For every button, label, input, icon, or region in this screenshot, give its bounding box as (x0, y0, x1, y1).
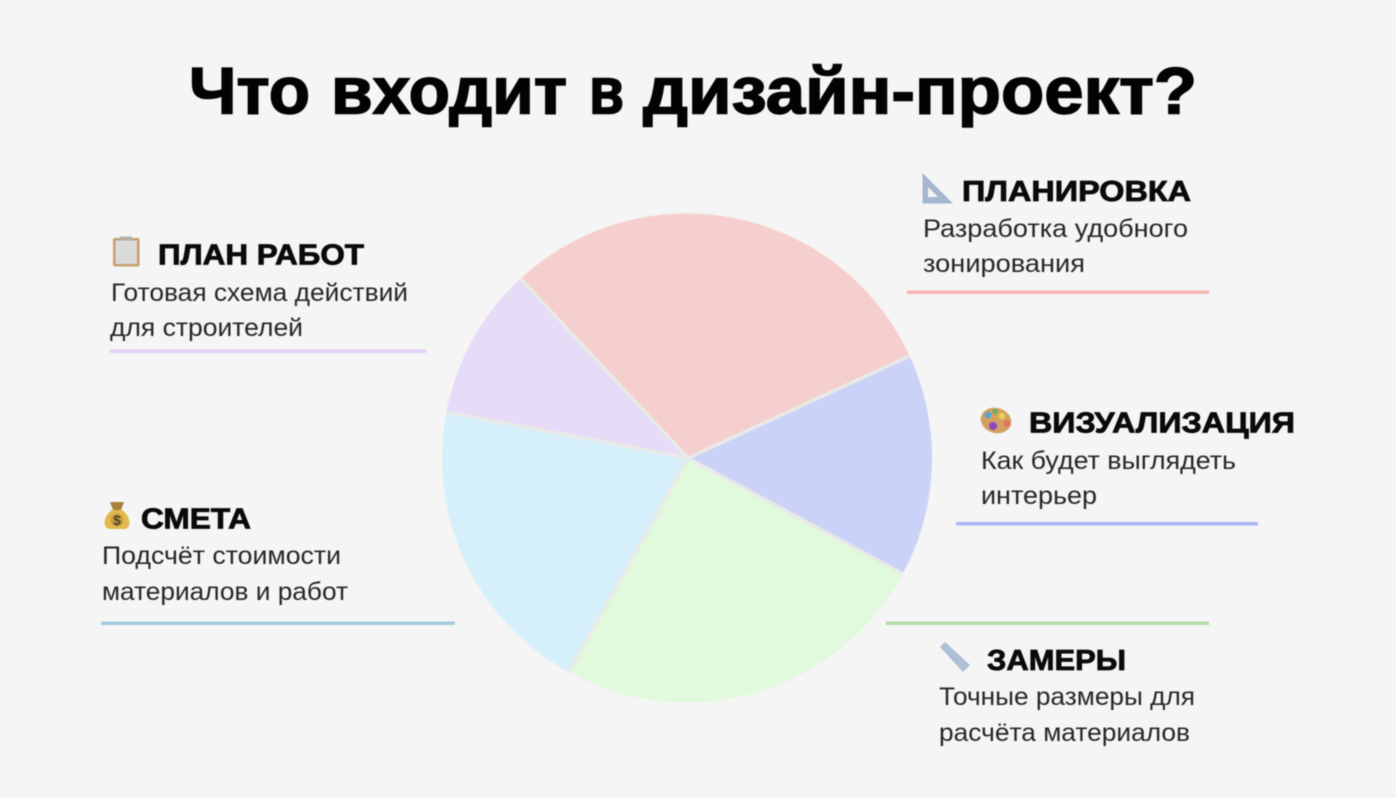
icon: palette (978, 404, 1014, 437)
text: визуализация: Как будет выглядеть (981, 447, 1236, 475)
panel: визуализация: интерьер (981, 482, 1097, 510)
panel: замеры: расчёта материалов (939, 719, 1190, 747)
slice: планировка (522, 213, 909, 456)
title: в (589, 54, 624, 128)
panel: замеры (886, 622, 1209, 747)
heading: замеры: ЗАМЕРЫ (987, 645, 1126, 677)
title: дизайн-проект? (643, 54, 1197, 128)
icon: money bag (105, 502, 129, 529)
text: планировка: Разработка удобного (923, 215, 1188, 243)
heading: планировка: ПЛАНИРОВКА (962, 176, 1191, 208)
panel: план работ: для строителей (110, 314, 303, 342)
title: входит (331, 54, 567, 128)
panel: смета: материалов и работ (102, 578, 349, 606)
heading: визуализация: ВИЗУАЛИЗАЦИЯ (1029, 408, 1295, 440)
slice: план работ (446, 280, 682, 455)
panel: смета (101, 502, 455, 625)
panel: планировка: зонирования (923, 250, 1085, 278)
title (189, 54, 1197, 128)
heading: план работ: ПЛАН РАБОТ (158, 240, 364, 272)
title: Что (189, 54, 310, 128)
icon: clipboard (113, 236, 140, 266)
heading: смета: СМЕТА (141, 504, 251, 536)
slice: визуализация (692, 358, 932, 572)
panel: план работ (110, 236, 426, 353)
icon: money bag: $ (113, 512, 121, 528)
panel: планировка (907, 173, 1209, 294)
text: план работ: Готовая схема действий (111, 279, 408, 307)
icon: set square (922, 173, 953, 204)
pie chart (442, 213, 932, 702)
panel: визуализация (956, 404, 1295, 526)
text: смета: Подсчёт стоимости (102, 542, 341, 570)
icon: ruler (940, 642, 970, 672)
text: замеры: Точные размеры для (939, 683, 1195, 711)
slice: смета (442, 414, 685, 671)
slice: замеры (570, 460, 902, 702)
